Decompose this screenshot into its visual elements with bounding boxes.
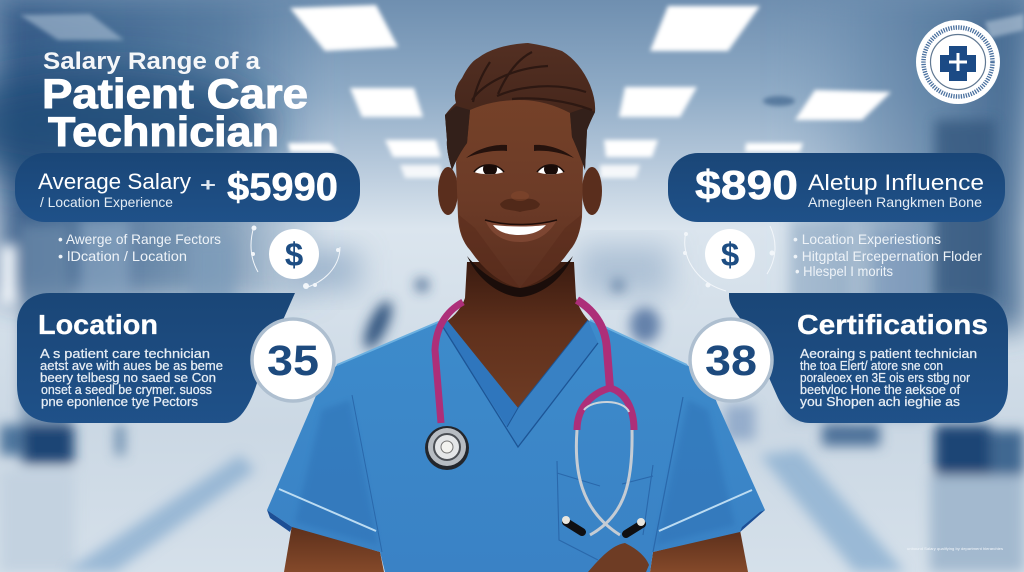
certifications body text: beetvloc Hone the aeksoe of: [800, 383, 961, 397]
location body text: [40, 347, 223, 409]
v-neck collar: [443, 320, 598, 447]
arms: [284, 525, 748, 572]
icon: left dollar coin: $: [285, 236, 303, 273]
right bullet list: [793, 231, 982, 279]
plus glyph: +: [200, 175, 216, 195]
salary value: $5990: [227, 166, 338, 209]
smile: [485, 220, 557, 242]
hand: [588, 543, 649, 572]
ceiling lights: [20, 5, 1024, 178]
left bullet list: • Awerge of Range Fectors: [58, 231, 221, 247]
left bullet list: [58, 231, 221, 264]
panel: certifications: [729, 293, 1008, 423]
certifications body text: Aeoraing s patient technician: [800, 347, 977, 361]
scrub shirt: [267, 320, 765, 572]
callout: 35: 35: [267, 337, 319, 385]
influence heading: Aletup Influence: [808, 170, 984, 195]
subtitle: / Location Experience: [40, 194, 173, 210]
location body text: A s patient care technician: [40, 347, 210, 361]
influence value: $890: [695, 162, 798, 208]
icon: right dollar coin: [683, 226, 775, 291]
title: Patient Care: [42, 70, 308, 117]
certifications body text: the toa Elert/ atore sne con: [800, 359, 943, 373]
location body text: pne eponlence tye Pectors: [41, 395, 198, 409]
nose: [500, 199, 540, 212]
panel: influence: [668, 153, 1005, 222]
influence subtitle: Amegleen Rangkmen Bone: [808, 194, 982, 210]
certifications body text: you Shopen ach ieghie as: [800, 395, 960, 409]
icon: right dollar coin: $: [721, 236, 739, 273]
icon: left dollar coin: [251, 226, 340, 289]
head: [438, 43, 602, 297]
stethoscope: [425, 300, 645, 535]
panel: average salary: [15, 153, 360, 222]
average salary label: Average Salary: [38, 169, 191, 194]
chest pocket: [557, 461, 653, 560]
figure: nurse in scrubs: [267, 43, 765, 572]
left bullet list: • lDcation / Location: [58, 248, 187, 264]
location heading: Location: [38, 309, 158, 340]
chin line beard: [467, 256, 573, 297]
location body text: aetst ave with aues be as beme: [40, 359, 223, 373]
title: [42, 48, 308, 155]
location body text: onset a seedl be crymer. suoss: [41, 383, 212, 397]
right bullet list: • Hlespel I morits: [795, 263, 893, 279]
certifications body text: [800, 347, 977, 409]
certifications heading: Certifications: [797, 309, 988, 340]
hair: [445, 43, 595, 170]
title: Technician: [48, 108, 279, 155]
right bullet list: • Location Experiestions: [793, 231, 941, 247]
location body text: beery telbesg no saed se Con: [40, 371, 216, 385]
eyes: [474, 164, 564, 174]
footer credit: unbound Salary qualifying by department hierarchies: [907, 547, 1003, 551]
neck and chest: [446, 262, 590, 410]
eyebrows: [466, 145, 507, 158]
certifications body text: poraleoex en 3E ois ers stbg nor: [800, 371, 970, 385]
icon: medical badge: [916, 20, 1000, 104]
right bullet list: • Hitgptal Ercepernation Floder: [793, 248, 982, 264]
callout: 38: 38: [705, 337, 757, 385]
callout: 38: [690, 319, 772, 401]
panel: location: [17, 293, 295, 423]
callout: 35: [252, 319, 334, 401]
title: Salary Range of a: [43, 48, 261, 75]
